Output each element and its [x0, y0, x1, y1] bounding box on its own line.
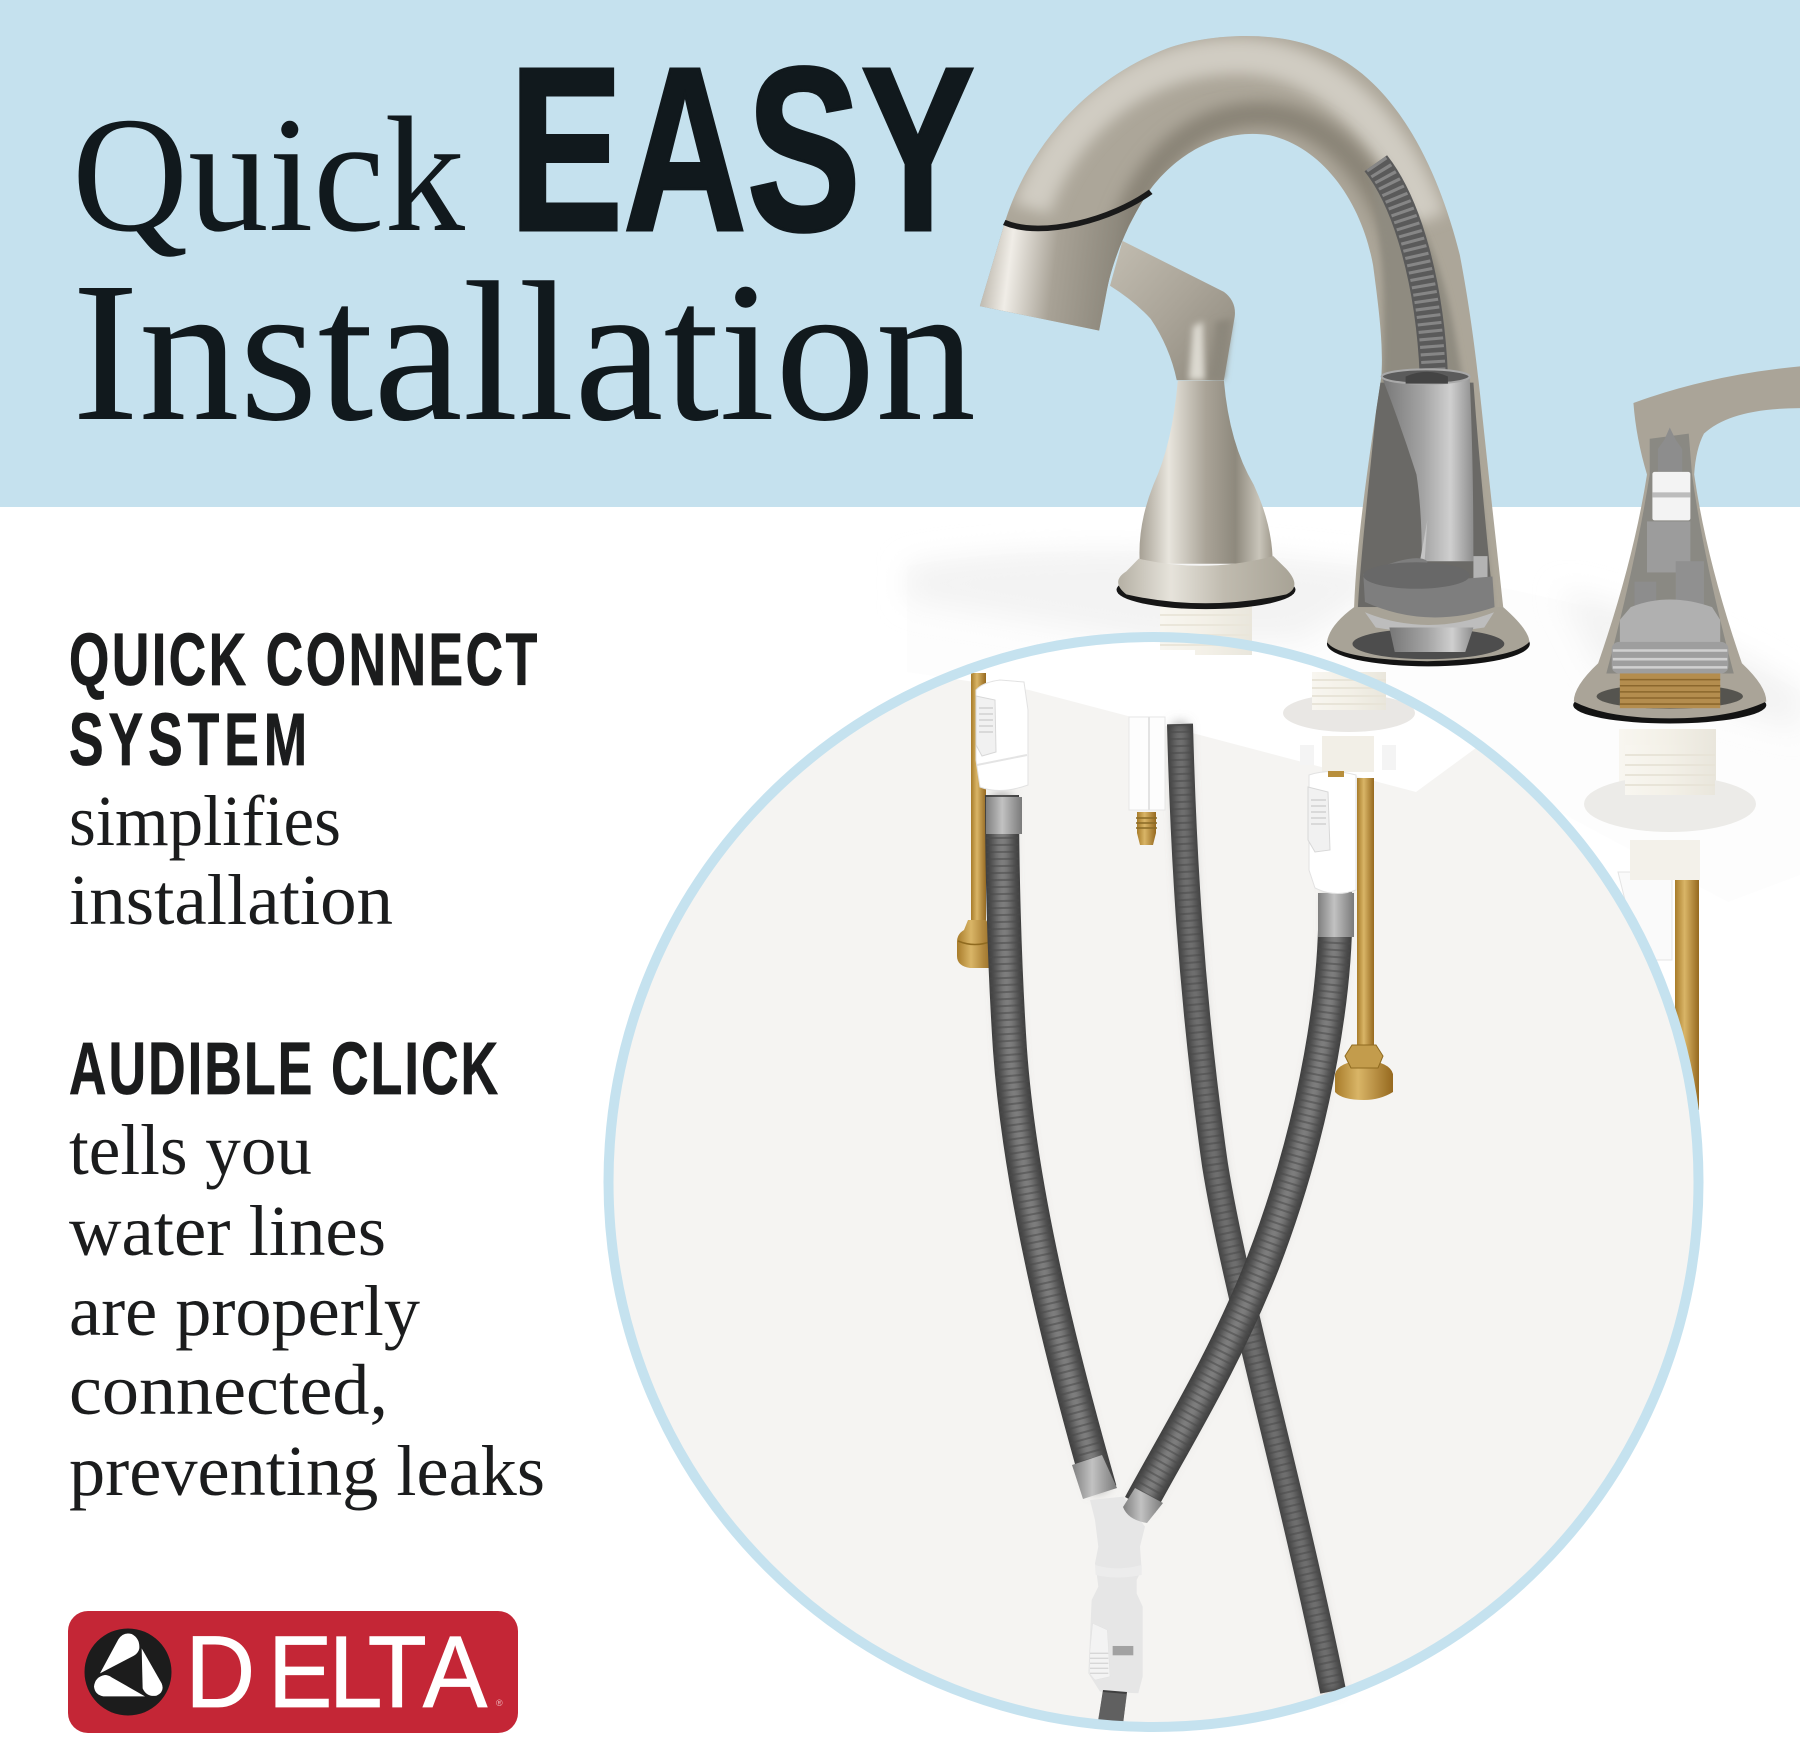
right handle — [1573, 366, 1800, 723]
faucet illustrations — [980, 36, 1800, 723]
Y connector — [1088, 1497, 1145, 1693]
title: Installation: Installation — [72, 242, 976, 463]
logo wordmark: DELTA — [185, 1616, 488, 1730]
text block: audible click: are properly — [69, 1271, 420, 1351]
spout inner cone — [1382, 369, 1488, 587]
right brass rod with nut — [1335, 778, 1393, 1100]
detail circle fill — [608, 637, 1698, 1727]
hose sleeves — [986, 797, 1354, 1523]
left handle lever — [1110, 241, 1235, 380]
text block: audible click — [69, 1027, 545, 1511]
right quick connector — [1308, 771, 1356, 894]
text block: audible click: water lines — [69, 1191, 386, 1271]
text block: quick connect system: SYSTEM — [69, 698, 307, 781]
text block: quick connect system: installation — [69, 860, 393, 940]
text block: audible click: AUDIBLE CLICK — [69, 1027, 498, 1110]
cartridge internals — [1612, 428, 1728, 708]
text block: quick connect system — [69, 618, 537, 940]
slab front overlay inside circle — [957, 642, 1475, 792]
text block: audible click: connected, — [69, 1350, 388, 1430]
text block: audible click: tells you — [69, 1110, 312, 1190]
hose below connector — [1098, 1690, 1127, 1724]
title: EASY: EASY — [509, 18, 975, 280]
logo: Delta — [68, 1611, 518, 1733]
right braided hose — [1140, 893, 1335, 1505]
icon: Delta triangle mark — [84, 1628, 172, 1716]
text block: audible click: preventing leaks — [69, 1431, 545, 1511]
right side gold rod behind circle — [1618, 872, 1699, 1110]
left brass rod with nut — [957, 673, 992, 968]
right faucet mounting thread and washer — [1584, 729, 1756, 880]
left quick connector — [976, 680, 1028, 791]
registered mark: ® — [496, 1698, 503, 1708]
spout braided hose — [1376, 163, 1434, 375]
text block: quick connect system: simplifies — [69, 781, 341, 861]
left braided hose — [1002, 795, 1100, 1490]
background: blue header band — [0, 0, 1800, 507]
spout base and ring — [1327, 558, 1530, 666]
left handle mounting thread — [1135, 605, 1252, 680]
left handle base — [1117, 556, 1296, 609]
title: Quick: Quick — [72, 83, 465, 266]
center post with brass tip — [1129, 717, 1165, 845]
spout — [980, 36, 1503, 622]
spout mounting thread and washer (ghosted) — [1283, 672, 1415, 772]
countertop slab — [907, 551, 1800, 902]
text block: quick connect system: QUICK CONNECT — [69, 618, 537, 701]
left handle body — [1139, 381, 1273, 564]
circle ring — [608, 637, 1698, 1727]
middle braided hose — [1180, 724, 1333, 1691]
